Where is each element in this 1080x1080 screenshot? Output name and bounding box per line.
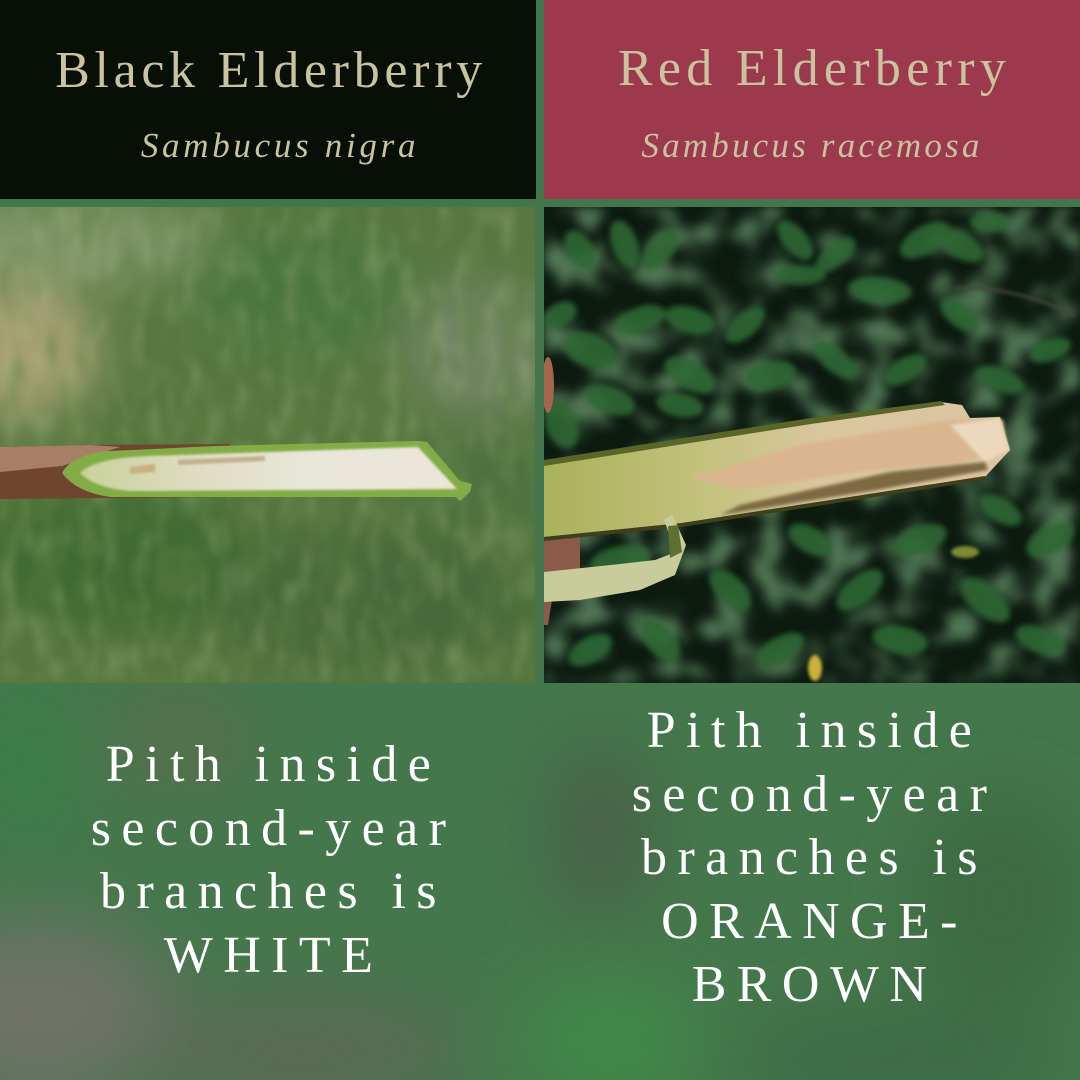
- bottom blurred green background: [0, 684, 1070, 1080]
- text block: red elderberry pith description: ORANGE-: [661, 892, 968, 950]
- text block: black elderberry pith description: WHITE: [164, 926, 383, 984]
- photo: black elderberry branch with white pith: [0, 207, 535, 683]
- foliage: [538, 213, 1080, 674]
- text block: red elderberry pith description: [632, 702, 997, 1013]
- text block: red elderberry pith description: Pith inside: [647, 702, 982, 759]
- text block: black elderberry pith description: branches is: [100, 863, 447, 920]
- text block: red elderberry pith description: BROWN: [692, 956, 937, 1013]
- photo: red elderberry branch with orange-brown pith: [544, 207, 1080, 683]
- branch: [0, 441, 472, 501]
- text block: red elderberry pith description: branches is: [641, 829, 988, 886]
- text block: black elderberry pith description: Pith inside: [106, 736, 441, 793]
- branch: [544, 401, 1010, 625]
- text block: black elderberry pith description: second-year: [91, 800, 456, 856]
- panel: red elderberry header: [544, 0, 1080, 199]
- species name: Sambucus nigra: Sambucus nigra: [141, 126, 419, 165]
- text block: red elderberry pith description: second-year: [632, 766, 997, 822]
- text block: black elderberry pith description: [91, 736, 456, 984]
- heading: Black Elderberry: Black Elderberry: [55, 42, 487, 99]
- panel: black elderberry header: [0, 0, 536, 199]
- species name: Sambucus racemosa: Sambucus racemosa: [641, 126, 983, 165]
- heading: Red Elderberry: Red Elderberry: [618, 40, 1011, 97]
